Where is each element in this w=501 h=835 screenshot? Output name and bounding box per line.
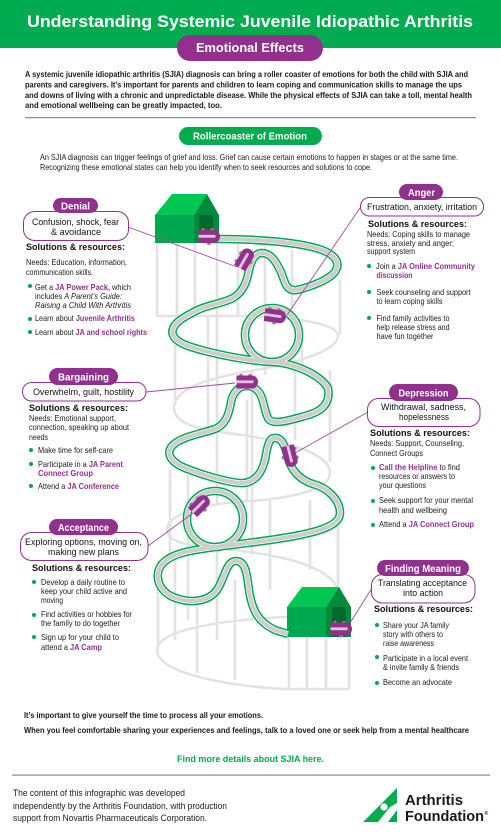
acceptance resources xyxy=(32,563,132,652)
bargaining callout: Bargaining xyxy=(58,372,109,384)
denial resources: communication skills. xyxy=(26,267,93,277)
depression resources xyxy=(370,428,474,529)
pill: Rollercoaster of Emotion xyxy=(179,127,322,145)
anger resources xyxy=(367,219,475,341)
anger resources: have fun together xyxy=(376,331,434,341)
denial resources: Needs: Education, information, xyxy=(26,257,127,267)
logo wordmark: ® xyxy=(484,810,488,817)
bargaining resources: Needs: Emotional support, xyxy=(29,413,116,423)
anger resources: Find family activities to xyxy=(376,313,450,323)
panel: denial xyxy=(24,198,147,337)
denial callout xyxy=(24,198,128,240)
pill: Emotional Effects: Emotional Effects xyxy=(196,41,304,55)
closing text xyxy=(24,710,469,735)
finding meaning resources: Solutions & resources: xyxy=(374,604,473,615)
footer disclosure: independently by the Arthritis Foundation, with production xyxy=(13,801,227,812)
finding meaning callout: into action xyxy=(403,588,443,599)
depression resources: health and wellbeing xyxy=(379,505,447,515)
acceptance resources: Sign up for your child to xyxy=(41,632,119,642)
car: bargaining xyxy=(236,374,258,391)
rollercoaster description xyxy=(40,152,458,172)
anger callout: Frustration, anxiety, irritation xyxy=(367,202,477,213)
acceptance callout: making new plans xyxy=(48,547,119,558)
denial callout: Denial xyxy=(61,200,90,212)
anger resources: stress, anxiety and anger; xyxy=(367,238,454,248)
anger resources: discussion xyxy=(376,270,412,280)
bargaining resources: Solutions & resources: xyxy=(29,403,128,414)
bargaining resources: Make time for self-care xyxy=(38,445,113,455)
acceptance resources: Develop a daily routine to xyxy=(41,577,125,587)
title: Understanding Systemic Juvenile Idiopathic Arthritis xyxy=(27,12,473,31)
depression callout: Depression xyxy=(398,388,448,400)
rollercoaster description: Recognizing these emotional states can help you identify when to seek resources and solutions to cope. xyxy=(40,162,372,172)
denial resources: includes A Parent’s Guide: xyxy=(35,291,122,301)
car: start xyxy=(198,228,220,245)
acceptance callout: Acceptance xyxy=(58,522,109,534)
footer disclosure xyxy=(13,788,227,824)
depression callout xyxy=(368,384,480,426)
denial callout: Confusion, shock, fear xyxy=(32,217,119,228)
depression resources: Seek support for your mental xyxy=(379,495,473,505)
anger resources: to learn coping skills xyxy=(376,296,442,306)
denial resources: Get a JA Power Pack, which xyxy=(35,282,131,292)
acceptance resources: Solutions & resources: xyxy=(32,563,131,574)
link: find more details: Find more details about SJIA here. xyxy=(177,754,324,765)
acceptance resources: attend a JA Camp xyxy=(41,642,102,652)
denial resources: Solutions & resources: xyxy=(26,242,125,253)
bargaining resources: connection, speaking up about xyxy=(29,422,130,432)
finding meaning callout xyxy=(372,560,475,603)
car: finding meaning xyxy=(330,621,352,638)
anger resources: Join a JA Online Community xyxy=(376,261,475,271)
bargaining resources: Attend a JA Conference xyxy=(38,481,119,491)
denial resources: Learn about JA and school rights xyxy=(35,327,147,337)
intro paragraph: parents and caregivers. It’s important for parents and children to learn coping and communication skills to manage the ups xyxy=(25,80,462,90)
depression resources: Attend a JA Connect Group xyxy=(379,519,474,529)
logo wordmark: Arthritis xyxy=(405,792,463,809)
logo mark xyxy=(363,788,397,822)
panel: depression xyxy=(368,384,480,529)
bargaining resources xyxy=(29,403,130,491)
logo: Arthritis Foundation xyxy=(363,788,488,825)
bargaining resources: Participate in a JA Parent xyxy=(38,459,123,469)
depression callout: Withdrawal, sadness, xyxy=(381,402,466,413)
depression resources: Call the Helpline to find xyxy=(379,462,460,472)
acceptance callout xyxy=(20,519,148,560)
bargaining callout xyxy=(22,368,146,401)
closing text: When you feel comfortable sharing your experiences and feelings, talk to a loved one or seek help from a mental healthcare xyxy=(24,725,469,735)
panel: finding meaning xyxy=(372,560,475,687)
rollercoaster track xyxy=(158,239,340,634)
pill: Emotional Effects xyxy=(177,35,323,61)
acceptance resources: moving xyxy=(41,595,63,605)
intro paragraph xyxy=(25,69,472,110)
footer disclosure: The content of this infographic was developed xyxy=(13,788,185,799)
denial resources: Raising a Child With Arthritis xyxy=(35,300,131,310)
depression callout: hopelessness xyxy=(399,412,449,423)
anger resources: support system xyxy=(367,246,415,256)
finding meaning resources: story with others to xyxy=(383,629,443,639)
acceptance callout: Exploring options, moving on, xyxy=(25,537,142,548)
logo wordmark: Foundation xyxy=(405,808,484,825)
finding meaning callout: Translating acceptance xyxy=(378,578,467,589)
intro paragraph: and emotional wellbeing can be greatly impacted, too. xyxy=(25,100,222,110)
finding meaning resources: & invite family & friends xyxy=(383,662,459,672)
pill: Rollercoaster of Emotion: Rollercoaster of Emotion xyxy=(193,130,307,142)
acceptance resources: Find activities or hobbies for xyxy=(41,609,132,619)
car: depression xyxy=(279,444,301,469)
finding meaning resources: raise awareness xyxy=(383,638,434,648)
leader lines xyxy=(128,208,372,623)
depression resources: Solutions & resources: xyxy=(370,428,470,439)
closing text: It’s important to give yourself the time to process all your emotions. xyxy=(24,710,263,720)
anger resources: Needs: Coping skills to manage xyxy=(367,229,470,239)
denial resources xyxy=(26,242,147,337)
finding meaning callout: Finding Meaning xyxy=(385,563,461,575)
anger callout: Anger xyxy=(408,187,435,199)
anger resources: Seek counseling and support xyxy=(376,287,471,297)
depression resources: your questions xyxy=(379,480,426,490)
denial callout: & avoidance xyxy=(51,227,101,238)
bargaining resources: needs xyxy=(29,432,48,442)
rollercoaster support structure xyxy=(157,243,350,690)
depression resources: resources or answers to xyxy=(379,471,455,481)
depression resources: Needs: Support, Counseling, xyxy=(370,438,464,448)
depression resources: Connect Groups xyxy=(370,448,423,458)
anger callout xyxy=(360,184,484,216)
panel: acceptance xyxy=(20,519,148,652)
header banner xyxy=(0,0,501,48)
acceptance resources: keep your child active and xyxy=(41,586,127,596)
panel: bargaining xyxy=(22,368,146,491)
finding meaning resources xyxy=(374,604,473,687)
car: acceptance xyxy=(187,491,214,519)
acceptance resources: the family to do together xyxy=(41,618,120,628)
station: bottom xyxy=(287,587,351,637)
finding meaning resources: Participate in a local event xyxy=(383,653,469,663)
finding meaning resources: Become an advocate xyxy=(383,677,452,687)
logo wordmark xyxy=(405,792,488,825)
station: top xyxy=(155,194,219,243)
bargaining resources: Connect Group xyxy=(38,468,93,478)
anger resources: Solutions & resources: xyxy=(368,219,467,230)
car: denial xyxy=(233,245,258,272)
car: anger xyxy=(263,306,287,326)
anger resources: help release stress and xyxy=(376,322,450,332)
panel: anger xyxy=(360,184,484,341)
footer disclosure: support from Novartis Pharmaceuticals Corporation. xyxy=(13,813,207,824)
denial resources: Learn about Juvenile Arthritis xyxy=(35,313,135,323)
finding meaning resources: Share your JA family xyxy=(383,620,450,630)
bargaining callout: Overwhelm, guilt, hostility xyxy=(33,387,134,398)
